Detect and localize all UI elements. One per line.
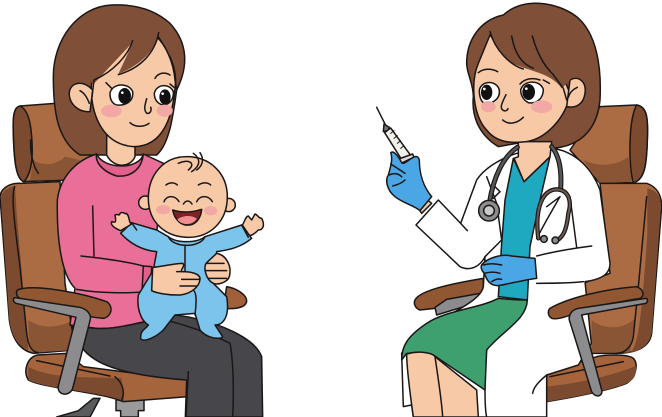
armrest of mother's chair <box>13 288 111 394</box>
baby's suit <box>121 223 252 340</box>
armrest of doctor's chair <box>548 287 647 396</box>
doctor's blush <box>481 100 552 113</box>
baby's ears <box>139 196 235 212</box>
mother's chair <box>0 103 247 417</box>
doctor's scrub top <box>498 157 550 300</box>
doctor in chair <box>377 3 662 417</box>
doctor's hair back <box>467 3 600 148</box>
doctor's face <box>474 13 585 142</box>
doctor's neck <box>514 142 552 182</box>
mother's hair back <box>53 5 185 155</box>
doctor's legs <box>407 352 478 417</box>
doctor's eyes <box>479 82 499 103</box>
doctor's hand with blue glove holding syringe <box>387 152 432 213</box>
mother's ear <box>69 83 93 112</box>
baby's face <box>156 183 217 215</box>
syringe <box>377 107 415 176</box>
trouser folds <box>172 322 233 417</box>
mother and baby in chair <box>0 5 263 417</box>
baby's head <box>148 157 227 237</box>
mother's eyes <box>110 85 133 105</box>
baby's right hand <box>242 214 263 235</box>
mother's fringe <box>90 13 172 85</box>
doctor's resting hand with blue glove <box>481 255 537 286</box>
mother's trousers <box>72 315 263 417</box>
baby's left hand <box>111 212 132 231</box>
mother's smile and nose <box>130 99 151 126</box>
doctor's ear <box>567 78 585 107</box>
doctor's coat <box>402 148 610 417</box>
doctor's chair <box>414 105 662 402</box>
doctor's smile and nose <box>501 95 523 123</box>
mother's hands <box>152 253 230 295</box>
mother's sweater <box>57 154 173 329</box>
doctor's fringe <box>490 13 577 88</box>
mother's blush <box>101 105 122 117</box>
doctor's skirt <box>402 298 527 390</box>
baby's hair curl <box>178 153 202 172</box>
baby <box>111 153 263 340</box>
baby's open mouth <box>173 209 202 225</box>
stethoscope <box>479 147 570 244</box>
mother's face <box>69 13 177 147</box>
mother's neck <box>107 133 135 165</box>
